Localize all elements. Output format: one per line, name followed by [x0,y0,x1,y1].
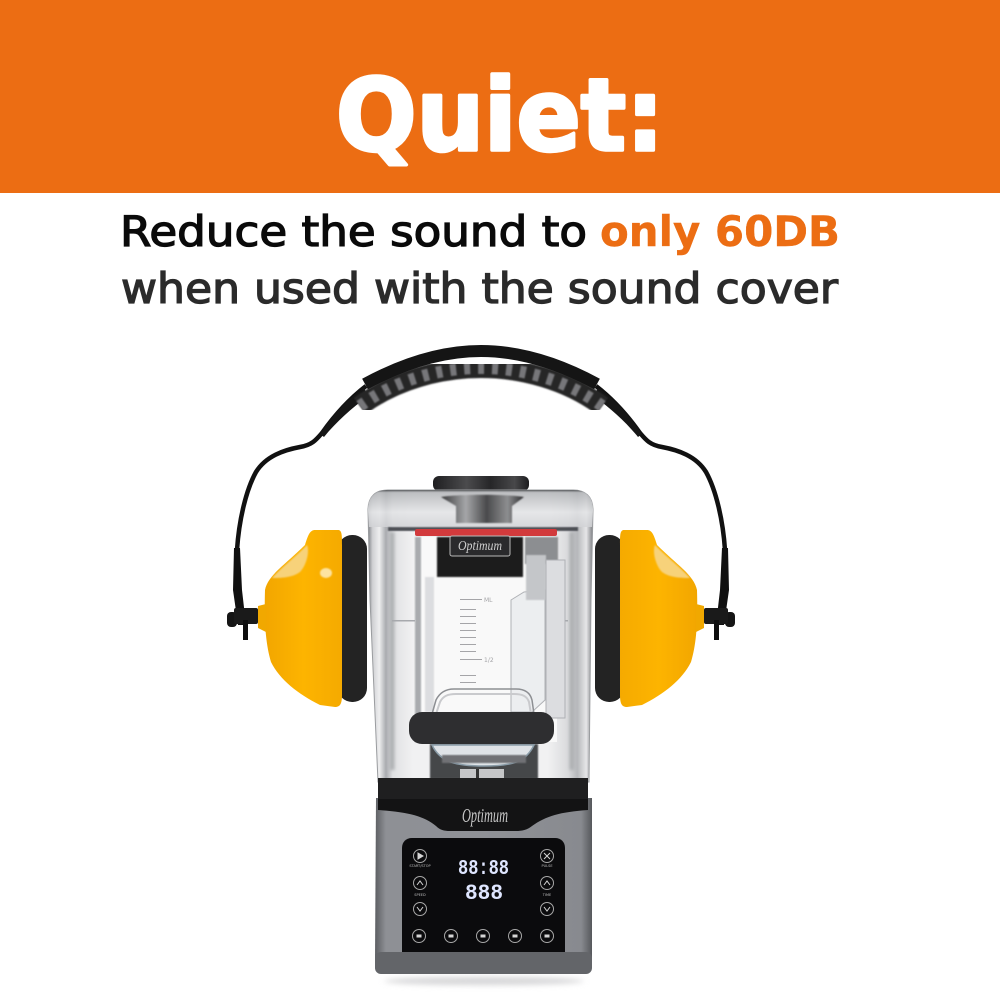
blender jar [415,529,565,742]
brand plate: Optimum [462,805,508,827]
control panel [402,838,565,952]
subtitle: second line: when used with the sound cover [121,264,839,313]
measurement scale: 1/2 [484,657,494,664]
subtitle: first line [120,207,840,256]
button captions: SPEED [414,893,426,897]
subtitle: first line: Reduce the sound to [120,207,587,256]
measurement scale: ML [484,597,493,604]
brand plate [378,799,588,831]
jar handle [511,590,545,712]
button captions: START/STOP [409,864,431,868]
transparent sound cover [368,490,593,782]
button captions: TIME [542,893,551,897]
rubber jar ring [409,712,554,744]
red lid seal [415,529,557,536]
right ear cup [595,530,735,707]
lid neck [441,495,524,523]
jar brand label [450,536,510,556]
measurement scale [460,597,494,683]
subtitle: first line: only 60DB [600,207,840,256]
button glyphs [417,853,550,937]
jar brand label: Optimum [458,539,502,554]
title: Quiet: [336,57,664,174]
time display: 88:88 [458,858,509,881]
jar base loop [432,689,534,714]
speed display: 888 [465,881,503,906]
header banner [0,0,1000,193]
button captions: PULSE [541,864,553,868]
left ear cup [227,530,367,707]
button captions [409,864,553,897]
jar foot and blades [430,744,538,779]
illustration: blender wearing ear defenders [227,351,735,985]
sound cover lid knob [433,476,529,491]
touch buttons [412,850,554,942]
headband [237,351,725,550]
blender base [375,778,592,985]
